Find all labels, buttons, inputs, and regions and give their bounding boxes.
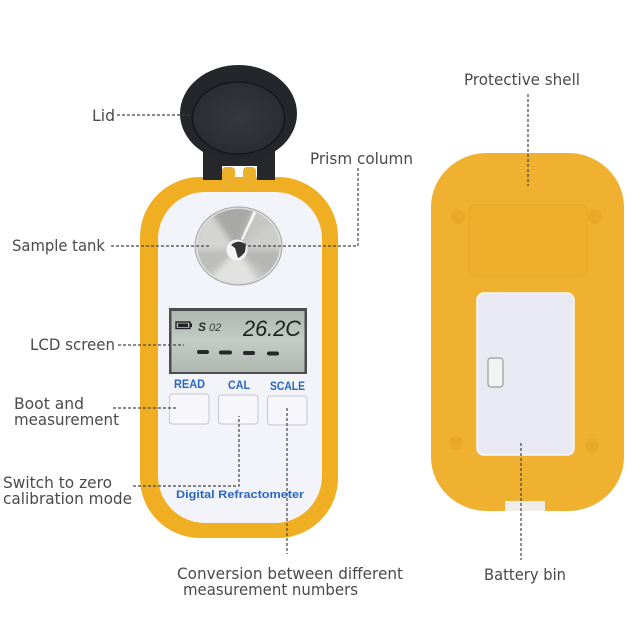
lid [180,65,297,180]
label: LCD screen: LCD screen [30,335,115,354]
brand name: Digital Refractometer [176,489,305,501]
device front: yellow meter [140,65,338,538]
bottom notch [505,501,545,511]
device back: protective shell [431,153,624,511]
battery latch [488,358,503,387]
label: Conversion between different measurement numbers: Conversion between different [177,564,403,583]
label: Prism column: Prism column [310,149,413,168]
yellow housing [140,177,338,538]
label: Protective shell [464,70,580,186]
button labels: CAL [228,378,250,392]
hinge tabs [222,167,256,190]
label: Switch to zero calibration mode [3,416,239,508]
LCD dashes [197,350,279,356]
LCD screen [169,308,307,374]
label: Conversion between different measurement numbers [177,408,403,599]
sample tank [195,205,285,290]
label: Sample tank: Sample tank [12,236,106,255]
LCD screen: 02 [209,322,221,334]
label: Boot and measurement: measurement [14,410,119,429]
button labels: READ [174,377,205,391]
battery bin cover [477,293,574,455]
shell body [431,153,624,511]
buttons [170,394,307,425]
lid hinge arms [203,150,275,180]
label: Prism column [246,149,413,246]
label: Protective shell: Protective shell [464,70,580,89]
label: Switch to zero calibration mode: calibration mode [3,489,132,508]
LCD status: S [198,320,206,334]
LCD temperature: 26.2C [242,316,301,341]
label: Battery bin: Battery bin [484,565,566,584]
label: Lid [92,106,190,125]
button labels [174,377,305,393]
screw bosses [449,210,602,453]
battery icon [176,322,192,328]
button labels: SCALE [270,379,305,393]
label: Lid: Lid [92,106,115,125]
label: Switch to zero calibration mode: Switch to zero [3,473,112,492]
label: Boot and measurement [14,394,176,429]
white face panel [158,192,322,523]
label: Boot and measurement: Boot and [14,394,84,413]
label: Conversion between different measurement numbers: measurement numbers [183,580,358,599]
